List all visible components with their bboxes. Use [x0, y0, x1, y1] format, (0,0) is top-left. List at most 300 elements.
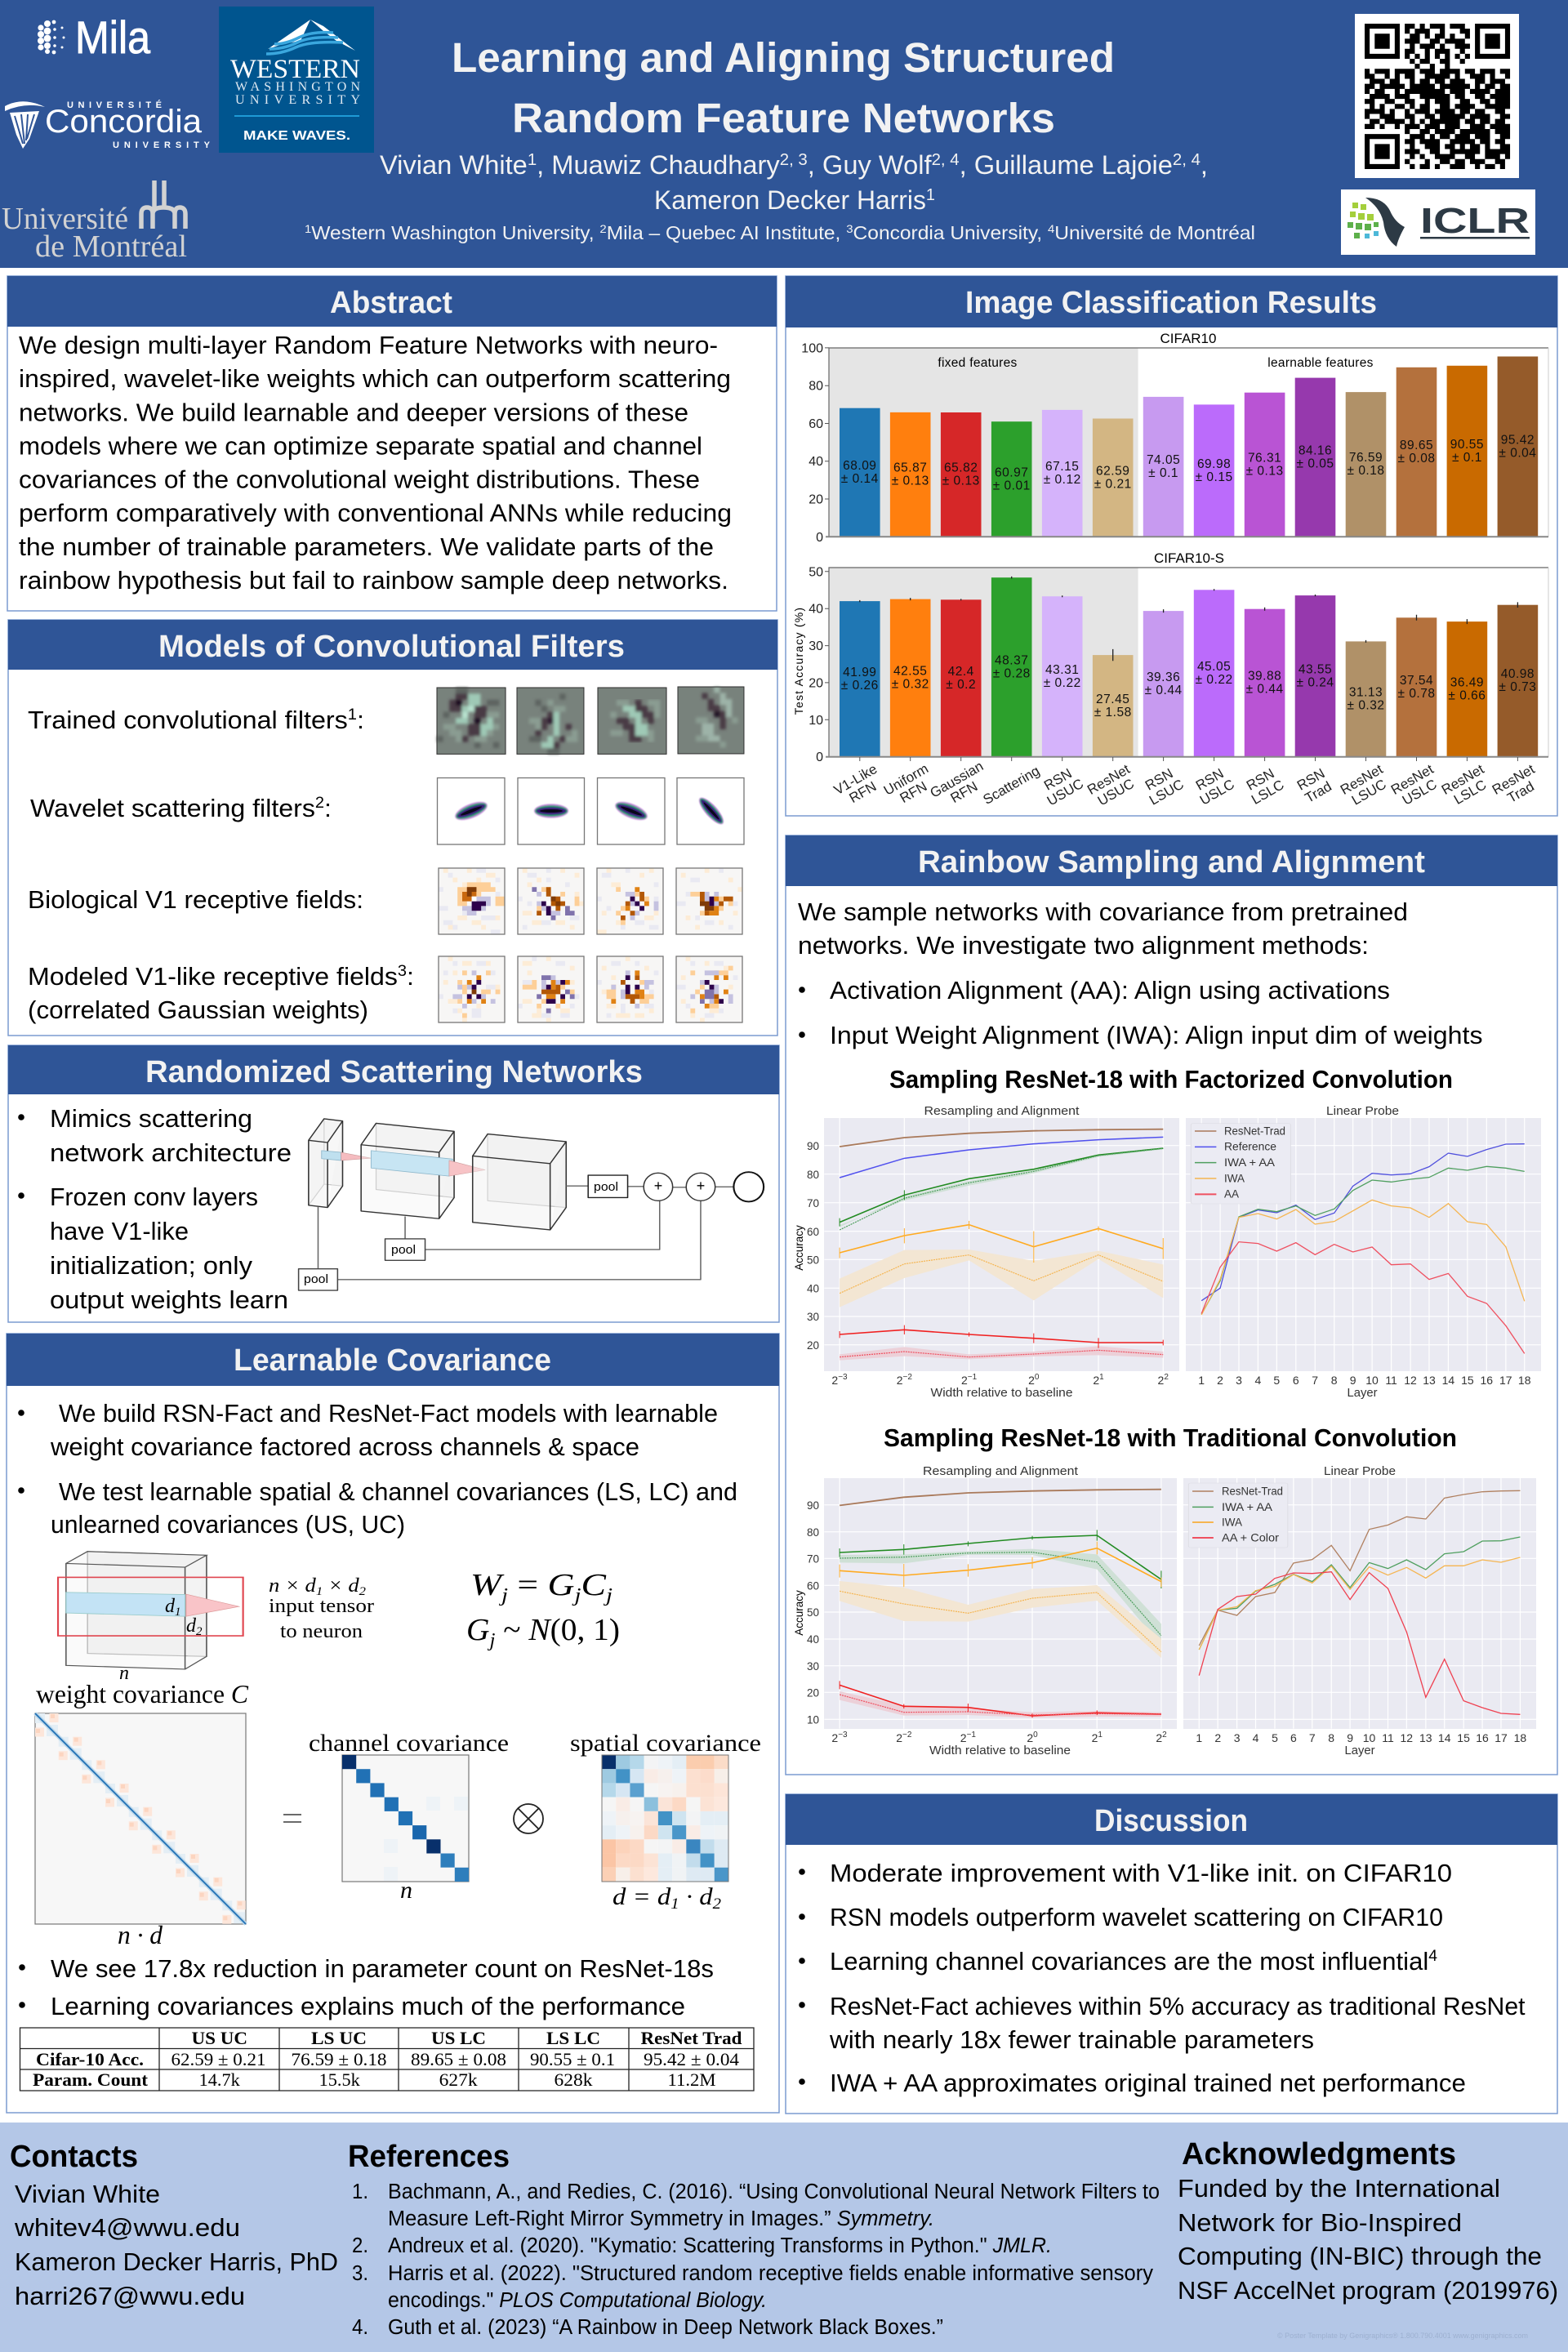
- bar chart: CIFAR10: 76.31: [1248, 451, 1281, 466]
- input tensor caption: n × d: [269, 1575, 311, 1597]
- contacts: Kameron Decker Harris, PhD: [15, 2248, 338, 2276]
- x-axis category labels: RSN: [1294, 765, 1328, 794]
- bar chart: CIFAR10: 68.09: [843, 459, 876, 473]
- line chart: traditional resampling and alignment: 90: [807, 1499, 819, 1512]
- bullets: model description: unlearned covariances (US, UC): [51, 1511, 405, 1539]
- bullets: model description: weight covariance factored across channels & space: [50, 1433, 639, 1461]
- heading: rainbow sampling: Rainbow Sampling and Alignment: [918, 845, 1425, 880]
- table: parameter counts: 11.2M: [668, 2069, 715, 2090]
- logo: Mila: [38, 11, 151, 63]
- equations: j: [498, 1585, 508, 1606]
- x-axis category labels: RFN: [898, 778, 929, 806]
- footer band: [0, 2123, 1568, 2352]
- x-axis category labels: [831, 758, 1545, 813]
- line chart: factorized resampling and alignment: 40: [807, 1282, 819, 1295]
- x-axis category labels: RFN: [847, 778, 879, 806]
- diagram: scattering network architecture: pool: [594, 1180, 618, 1194]
- trained convolutional filters: [437, 687, 744, 754]
- line chart: traditional linear probe: IWA: [1222, 1515, 1243, 1528]
- bar chart: CIFAR10-S: ± 0.66: [1448, 688, 1486, 702]
- acknowledgments: [1178, 2137, 1558, 2305]
- panel: randomized scattering networks: [8, 1045, 779, 1322]
- channel covariance matrix: [309, 1730, 509, 1904]
- table: parameter counts: US UC: [191, 2028, 247, 2048]
- bar chart: CIFAR10-S: ± 1.58: [1094, 706, 1132, 719]
- equations: =: [508, 1568, 548, 1602]
- table: parameter counts: US LC: [431, 2028, 486, 2048]
- line chart: factorized linear probe: 3: [1236, 1374, 1242, 1387]
- contacts: harri267@wwu.edu: [15, 2283, 245, 2310]
- bullets: [18, 1105, 292, 1314]
- spatial covariance matrix: · d: [679, 1883, 714, 1910]
- table: parameter counts: ResNet Trad: [640, 2028, 742, 2048]
- logo: Western Washington University: [219, 7, 374, 153]
- line chart: traditional resampling and alignment: 40: [807, 1633, 819, 1646]
- table: parameter counts: LS LC: [546, 2028, 600, 2048]
- abstract text: covariances of the convolutional weight distributions. These: [19, 466, 700, 493]
- row labels: :: [407, 963, 414, 991]
- line chart: factorized linear probe: 17: [1499, 1374, 1512, 1387]
- row labels: Modeled V1-like receptive fields: [28, 963, 380, 991]
- bar chart: CIFAR10-S: 40: [808, 603, 823, 617]
- diagram: scattering network architecture: [299, 1119, 764, 1290]
- bar chart: CIFAR10-S: ± 0.32: [1348, 699, 1384, 712]
- line chart: factorized resampling and alignment: 1: [1099, 1373, 1104, 1382]
- line chart: traditional resampling and alignment: 1: [1098, 1731, 1102, 1740]
- line chart: traditional linear probe: 6: [1290, 1731, 1297, 1744]
- title: Learning and Aligning Structured: [452, 34, 1115, 81]
- bar chart: CIFAR10: ± 0.05: [1297, 457, 1334, 470]
- references: 4.: [352, 2316, 368, 2339]
- bar chart: CIFAR10: 60.97: [995, 466, 1028, 479]
- spatial covariance matrix: 1: [670, 1895, 679, 1913]
- row labels: :: [324, 795, 332, 822]
- line chart: factorized resampling and alignment: 2: [961, 1374, 968, 1387]
- authors: 1: [528, 151, 537, 169]
- spatial covariance matrix: spatial covariance: [570, 1730, 761, 1757]
- diagram: scattering network architecture: +: [697, 1178, 705, 1194]
- input tensor caption: 1: [316, 1585, 323, 1598]
- logo: ICLR: [1341, 189, 1535, 255]
- line chart: factorized resampling and alignment: [793, 1105, 1179, 1400]
- panel: rainbow sampling and alignment: [786, 835, 1557, 1775]
- bar chart: CIFAR10-S: 39.36: [1147, 670, 1180, 684]
- equations: j: [603, 1585, 612, 1606]
- input tensor caption: [269, 1575, 374, 1642]
- line chart: traditional resampling and alignment: Width relative to baseline: [929, 1744, 1071, 1757]
- line chart: traditional linear probe: 11: [1382, 1731, 1394, 1744]
- line chart: traditional resampling and alignment: 20: [807, 1687, 819, 1699]
- logo: Concordia University: UNIVERSITY: [113, 140, 211, 150]
- x-axis category labels: USUC: [1095, 776, 1137, 808]
- logo: Concordia University: Concordia: [45, 104, 203, 140]
- line chart: factorized resampling and alignment: 2: [1093, 1374, 1099, 1387]
- x-axis category labels: RSN: [1041, 765, 1075, 794]
- acknowledgments: NSF AccelNet program (2019976): [1178, 2277, 1558, 2305]
- line chart: traditional resampling and alignment: −2: [902, 1731, 912, 1740]
- bar chart: CIFAR10: 65.87: [893, 461, 927, 475]
- diagram: input tensor: [58, 1552, 243, 1684]
- spatial covariance matrix: d = d: [612, 1883, 666, 1910]
- bar chart: CIFAR10: 89.65: [1400, 439, 1433, 452]
- line chart: factorized resampling and alignment: 70: [807, 1197, 819, 1209]
- affiliations: Université de Montréal: [1054, 222, 1255, 243]
- abstract text: perform comparatively with conventional ANNs while reducing: [19, 500, 732, 528]
- authors: , Muawiz Chaudhary: [537, 150, 780, 180]
- bar chart: CIFAR10-S: ± 0.78: [1398, 687, 1435, 701]
- line chart: traditional linear probe: 5: [1272, 1731, 1278, 1744]
- contacts: Contacts: [10, 2140, 138, 2174]
- intro text: We sample networks with covariance from pretrained: [798, 898, 1408, 926]
- line chart: factorized resampling and alignment: Width relative to baseline: [931, 1387, 1073, 1400]
- equations: W: [470, 1568, 505, 1602]
- logo: Western Washington University: WESTERN: [230, 55, 360, 84]
- references: Bachmann, A., and Redies, C. (2016). “Using Convolutional Neural Network Filters to: [388, 2180, 1160, 2203]
- logo: Western Washington University: UNIVERSITY: [235, 93, 360, 107]
- row labels: 2: [315, 795, 324, 812]
- bar chart: CIFAR10: ± 0.12: [1044, 473, 1081, 487]
- table: parameter counts: Cifar-10 Acc.: [36, 2049, 144, 2069]
- row labels: Trained convolutional filters: [28, 706, 330, 734]
- line chart: factorized linear probe: 12: [1404, 1374, 1417, 1387]
- references: encodings." PLOS Computational Biology.: [388, 2289, 767, 2312]
- line chart: traditional resampling and alignment: 10: [807, 1713, 819, 1726]
- discussion bullets: [799, 1860, 1526, 2097]
- bar chart: CIFAR10: ± 0.21: [1094, 477, 1132, 491]
- bar chart: CIFAR10-S: 42.4: [948, 665, 974, 679]
- x-axis category labels: Trad: [1303, 778, 1334, 806]
- equations: ~: [495, 1613, 528, 1647]
- input tensor caption: input tensor: [269, 1596, 374, 1617]
- discussion bullets: with nearly 18x fewer trainable parameters: [829, 2026, 1314, 2054]
- line chart: factorized resampling and alignment: −3: [838, 1373, 848, 1382]
- panel: models of convolutional filters: [8, 620, 777, 1036]
- affiliations: 2: [599, 222, 607, 235]
- line chart: traditional resampling and alignment: 2: [1027, 1731, 1033, 1744]
- input tensor caption: to neuron: [280, 1621, 363, 1642]
- line chart: traditional resampling and alignment: 2: [960, 1731, 967, 1744]
- table: parameter counts: [20, 2028, 754, 2091]
- bar chart: CIFAR10-S: Test Accuracy (%): [792, 607, 805, 715]
- acknowledgments: Acknowledgments: [1182, 2137, 1456, 2172]
- x-axis category labels: LSLC: [1451, 777, 1489, 808]
- diagram: input tensor: n: [119, 1663, 129, 1684]
- line chart: factorized resampling and alignment: 0: [1035, 1373, 1040, 1382]
- line chart: factorized resampling and alignment: 2: [831, 1374, 838, 1387]
- bar chart: CIFAR10: 76.59: [1349, 451, 1383, 465]
- line chart: factorized linear probe: 13: [1423, 1374, 1436, 1387]
- x-axis category labels: ResNet: [1439, 761, 1487, 798]
- abstract text: [19, 332, 732, 595]
- bar chart: CIFAR10-S: ± 0.73: [1499, 680, 1536, 694]
- references: 3.: [352, 2262, 368, 2285]
- references: [348, 2140, 1160, 2339]
- panel: image classification results: [786, 276, 1557, 816]
- line chart: traditional linear probe: 4: [1253, 1731, 1259, 1744]
- bar chart: CIFAR10: 62.59: [1096, 464, 1129, 478]
- equations: [466, 1568, 620, 1651]
- x-axis category labels: Scattering: [981, 763, 1042, 808]
- logo: ICLR: ICLR: [1420, 201, 1530, 241]
- logo: Université de Montréal: [2, 180, 187, 264]
- logo: Western Washington University: WASHINGTON: [235, 80, 360, 94]
- line chart: traditional resampling and alignment: 30: [807, 1660, 819, 1673]
- row labels: 1: [348, 706, 357, 724]
- references: 2.: [352, 2234, 368, 2257]
- line chart: factorized linear probe: 5: [1273, 1374, 1280, 1387]
- bar chart: CIFAR10: 67.15: [1045, 460, 1079, 474]
- x-axis category labels: RSN: [1193, 765, 1227, 794]
- acknowledgments: Network for Bio-Inspired: [1178, 2209, 1462, 2237]
- logo: Concordia University: UNIVERSITÉ: [67, 100, 162, 110]
- bar chart: CIFAR10: 84.16: [1298, 444, 1332, 457]
- abstract text: inspired, wavelet-like weights which can outperform scattering: [19, 365, 731, 393]
- references: Measure Left-Right Mirror Symmetry in Images.” Symmetry.: [388, 2207, 934, 2230]
- contacts: [10, 2140, 338, 2310]
- bar chart: CIFAR10-S: 50: [808, 565, 823, 579]
- bullets: results: We see 17.8x reduction in parameter count on ResNet-18s: [51, 1955, 714, 1983]
- bullets: initialization; only: [50, 1252, 253, 1280]
- bar chart: CIFAR10-S: [792, 550, 1548, 813]
- diagram: scattering network architecture: +: [654, 1178, 662, 1194]
- discussion bullets: Learning channel covariances are the most influential: [830, 1948, 1419, 1976]
- line chart: traditional resampling and alignment: Accuracy: [793, 1590, 805, 1636]
- bullets: model description: We build RSN-Fact and ResNet-Fact models with learnable: [59, 1400, 718, 1428]
- discussion bullets: RSN models outperform wavelet scattering on CIFAR10: [830, 1904, 1443, 1931]
- authors: 2, 4: [932, 151, 960, 169]
- line chart: traditional resampling and alignment: 80: [807, 1526, 819, 1539]
- bar chart: CIFAR10-S: 0: [816, 751, 823, 764]
- line chart: factorized linear probe: [1186, 1105, 1541, 1400]
- line chart: traditional linear probe: 9: [1347, 1731, 1353, 1744]
- line chart: traditional resampling and alignment: 60: [807, 1579, 819, 1592]
- authors: 1: [926, 186, 935, 204]
- heading: randomized scattering networks: Randomized Scattering Networks: [145, 1055, 643, 1089]
- line chart: traditional linear probe: 12: [1401, 1731, 1413, 1744]
- acknowledgments: Computing (IN-BIC) through the: [1178, 2243, 1542, 2270]
- affiliations: Western Washington University,: [311, 222, 599, 243]
- bar chart: CIFAR10-S: 41.99: [843, 666, 876, 679]
- affiliations: Mila – Quebec AI Institute,: [607, 222, 846, 243]
- bullets: output weights learn: [50, 1286, 288, 1314]
- bar chart: CIFAR10-S: ± 0.44: [1246, 683, 1284, 697]
- spatial covariance matrix: [570, 1730, 761, 1913]
- bullets: model description: We test learnable spatial & channel covariances (LS, LC) and: [59, 1478, 737, 1506]
- bar chart: CIFAR10-S: 37.54: [1400, 674, 1433, 688]
- line chart: traditional resampling and alignment: 2: [1092, 1731, 1098, 1744]
- bar chart: CIFAR10: ± 0.14: [841, 472, 879, 486]
- x-axis category labels: USUC: [1045, 776, 1086, 808]
- line chart: traditional linear probe: 14: [1438, 1731, 1451, 1744]
- authors: 2, 3: [780, 151, 808, 169]
- line chart: traditional linear probe: 13: [1419, 1731, 1432, 1744]
- line chart: traditional linear probe: AA + Color: [1222, 1531, 1279, 1544]
- x-axis category labels: RSN: [1143, 765, 1176, 794]
- references: Andreux et al. (2020). "Kymatio: Scattering Transforms in Python." JMLR.: [388, 2234, 1052, 2257]
- line chart: traditional resampling and alignment: −3: [838, 1731, 848, 1740]
- heading: image classification results: Image Classification Results: [965, 286, 1377, 320]
- bullets: Mimics scattering: [50, 1105, 252, 1133]
- line chart: factorized linear probe: Linear Probe: [1326, 1105, 1399, 1118]
- kronecker product symbol: [514, 1804, 543, 1833]
- x-axis category labels: LSUC: [1349, 777, 1389, 808]
- bar chart: CIFAR10-S: ± 0.28: [993, 666, 1031, 681]
- abstract text: rainbow hypothesis but fail to rainbow sample deep networks.: [19, 567, 728, 595]
- table: parameter counts: 89.65 ± 0.08: [411, 2049, 506, 2069]
- bar chart: CIFAR10: 0: [816, 531, 823, 545]
- table: parameter counts: 15.5k: [319, 2069, 360, 2090]
- references: Guth et al. (2023) “A Rainbow in Deep Network Black Boxes.”: [388, 2316, 943, 2339]
- bullets: network architecture: [50, 1139, 292, 1167]
- bar chart: CIFAR10: [801, 331, 1548, 545]
- logo: Mila: Mila: [75, 11, 151, 63]
- authors: [380, 150, 1208, 215]
- bar chart: CIFAR10-S: ± 0.26: [841, 679, 879, 693]
- logo: Concordia University: [5, 100, 211, 150]
- row labels: (correlated Gaussian weights): [28, 996, 368, 1024]
- bullets: model description: [18, 1400, 737, 1539]
- bar chart: CIFAR10: 90.55: [1450, 438, 1484, 452]
- line chart: factorized resampling and alignment: 80: [807, 1169, 819, 1181]
- line chart: traditional linear probe: [1183, 1465, 1536, 1757]
- bar chart: CIFAR10-S: 42.55: [893, 665, 927, 679]
- line chart: factorized resampling and alignment: 20: [807, 1339, 819, 1352]
- spatial covariance matrix: 2: [713, 1895, 722, 1913]
- table: parameter counts: 76.59 ± 0.18: [291, 2049, 387, 2069]
- intro text: Activation Alignment (AA): Align using activations: [830, 977, 1390, 1004]
- bar chart: CIFAR10: 95.42: [1501, 433, 1535, 447]
- line chart: factorized linear probe: 18: [1518, 1374, 1531, 1387]
- bar chart: CIFAR10: 60: [808, 417, 823, 431]
- line chart: traditional linear probe: 2: [1214, 1731, 1221, 1744]
- bar chart: CIFAR10: learnable features: [1267, 356, 1374, 370]
- bar chart: CIFAR10: ± 0.1: [1148, 466, 1178, 480]
- line chart: traditional resampling and alignment: 50: [807, 1606, 819, 1619]
- line chart: factorized resampling and alignment: Accuracy: [793, 1225, 805, 1271]
- diagram: scattering network architecture: pool: [304, 1272, 328, 1286]
- line chart: traditional resampling and alignment: [793, 1465, 1177, 1757]
- channel covariance matrix: n: [400, 1877, 412, 1904]
- bullets: results: Learning covariances explains much of the performance: [51, 1993, 685, 2020]
- line chart: factorized resampling and alignment: 50: [807, 1254, 819, 1266]
- row labels: Biological V1 receptive fields:: [28, 886, 363, 914]
- references: References: [348, 2140, 510, 2174]
- bar chart: CIFAR10-S: ± 0.44: [1145, 684, 1183, 697]
- table: parameter counts: LS UC: [311, 2028, 367, 2048]
- line chart: factorized resampling and alignment: −2: [902, 1373, 912, 1382]
- x-axis category labels: ResNet: [1085, 761, 1133, 798]
- affiliations: 4: [1048, 222, 1055, 235]
- bar chart: CIFAR10-S: CIFAR10-S: [1154, 550, 1224, 566]
- row labels: 3: [398, 963, 407, 980]
- line chart: traditional linear probe: 7: [1309, 1731, 1316, 1744]
- bar chart: CIFAR10-S: 20: [808, 676, 823, 690]
- bar chart: CIFAR10: 74.05: [1147, 453, 1180, 467]
- line chart: traditional resampling and alignment: 2: [1162, 1731, 1167, 1740]
- authors: ,: [1200, 150, 1208, 180]
- diagram: input tensor: 1: [175, 1606, 181, 1619]
- bar chart: CIFAR10-S: ± 0.2: [946, 678, 976, 692]
- x-axis category labels: RFN: [948, 778, 980, 806]
- equations: G: [466, 1613, 489, 1647]
- bar chart: CIFAR10: ± 0.1: [1452, 451, 1482, 465]
- line chart: factorized linear probe: 10: [1365, 1374, 1379, 1387]
- line chart: factorized linear probe: 1: [1198, 1374, 1205, 1387]
- equations: j: [487, 1630, 496, 1651]
- bar chart: CIFAR10-S: 27.45: [1096, 693, 1129, 706]
- line chart: factorized linear probe: 6: [1293, 1374, 1299, 1387]
- bar chart: CIFAR10: 69.98: [1197, 457, 1231, 471]
- affiliations: Concordia University,: [853, 222, 1048, 243]
- line chart: factorized linear probe: 9: [1350, 1374, 1356, 1387]
- line chart: factorized linear probe: AA: [1224, 1187, 1240, 1200]
- equals sign: [283, 1815, 301, 1822]
- diagram: input tensor: d: [186, 1615, 196, 1637]
- table: parameter counts: 95.42 ± 0.04: [644, 2049, 739, 2069]
- bullets: have V1-like: [50, 1218, 189, 1245]
- line chart: traditional resampling and alignment: 2: [896, 1731, 902, 1744]
- bar chart: CIFAR10-S: ± 0.32: [892, 678, 929, 692]
- authors: , Guy Wolf: [808, 150, 932, 180]
- line chart: factorized linear probe: 2: [1217, 1374, 1223, 1387]
- line chart: factorized resampling and alignment: 30: [807, 1311, 819, 1323]
- title: Random Feature Networks: [512, 95, 1055, 141]
- bar chart: CIFAR10-S: 43.31: [1045, 663, 1079, 677]
- acknowledgments: Funded by the International: [1178, 2175, 1500, 2203]
- bar chart: CIFAR10-S: 30: [808, 639, 823, 653]
- bar chart: CIFAR10: 100: [801, 341, 823, 356]
- header banner: [0, 0, 1568, 268]
- authors: 2, 4: [1173, 151, 1200, 169]
- table: parameter counts: 14.7k: [199, 2069, 240, 2090]
- heading: discussion: Discussion: [1094, 1804, 1248, 1838]
- bar chart: CIFAR10-S: ± 0.22: [1044, 676, 1081, 690]
- panel: discussion: [786, 1794, 1557, 2114]
- equations: C: [581, 1568, 607, 1602]
- line chart: traditional resampling and alignment: Resampling and Alignment: [923, 1465, 1078, 1478]
- table: parameter counts: 627k: [439, 2069, 478, 2090]
- line chart: traditional linear probe: 8: [1328, 1731, 1334, 1744]
- bar chart: CIFAR10-S: ± 0.24: [1297, 675, 1334, 689]
- bar chart: CIFAR10-S: 48.37: [995, 653, 1028, 668]
- x-axis category labels: LSLC: [1249, 777, 1287, 808]
- discussion bullets: ResNet-Fact achieves within 5% accuracy as traditional ResNet: [830, 1993, 1526, 2020]
- line chart: factorized linear probe: ResNet-Trad: [1224, 1124, 1285, 1137]
- equations: j: [572, 1585, 581, 1606]
- line chart: traditional resampling and alignment: 70: [807, 1553, 819, 1565]
- bullets: results: [19, 1955, 714, 2020]
- line chart: traditional linear probe: 17: [1494, 1731, 1508, 1744]
- line chart: factorized resampling and alignment: Resampling and Alignment: [924, 1105, 1080, 1118]
- subheading: factorized convolution: Sampling ResNet-18 with Factorized Convolution: [889, 1066, 1453, 1094]
- bar chart: CIFAR10: 20: [808, 493, 823, 506]
- x-axis category labels: V1-Like: [831, 761, 880, 798]
- line chart: traditional resampling and alignment: 2: [831, 1731, 838, 1744]
- bar chart: CIFAR10-S: 39.88: [1248, 670, 1281, 684]
- heading: learnable covariance: Learnable Covariance: [234, 1343, 551, 1378]
- line chart: factorized linear probe: 16: [1481, 1374, 1493, 1387]
- line chart: factorized linear probe: 15: [1461, 1374, 1474, 1387]
- contacts: Vivian White: [15, 2180, 160, 2208]
- x-axis category labels: USLC: [1197, 777, 1237, 808]
- logo: Western Washington University: MAKE WAVES.: [243, 129, 350, 143]
- bar chart: CIFAR10: ± 0.08: [1398, 452, 1435, 466]
- line chart: factorized linear probe: 8: [1331, 1374, 1338, 1387]
- line chart: factorized resampling and alignment: 90: [807, 1140, 819, 1152]
- row labels: Wavelet scattering filters: [30, 795, 301, 822]
- bar chart: CIFAR10: 80: [808, 380, 823, 394]
- line chart: factorized resampling and alignment: 2: [897, 1374, 902, 1387]
